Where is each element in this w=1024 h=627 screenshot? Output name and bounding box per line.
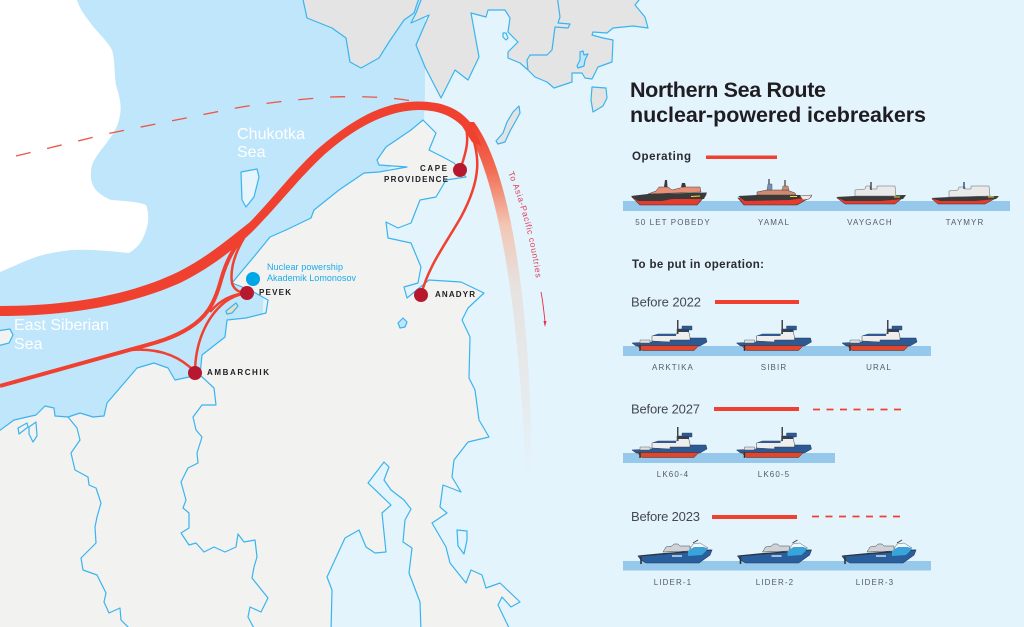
land: Siberian mainland xyxy=(0,120,520,627)
route fading toward Asia-Pacific xyxy=(462,122,532,482)
water strip: before 2027 xyxy=(623,453,835,463)
ship names: operating xyxy=(635,218,984,227)
ship names: operating: TAYMYR xyxy=(946,218,984,227)
heading: to be put in operation: To be put in operation: xyxy=(632,259,764,271)
title xyxy=(630,78,926,127)
branch to Pevek xyxy=(232,238,247,293)
ship names: before 2023 xyxy=(654,578,894,587)
nuclear powership marker xyxy=(246,262,356,286)
rivers and coast inlets xyxy=(68,417,133,627)
ship: Arktika xyxy=(632,320,707,351)
legend: before 2022: Before 2022 xyxy=(631,294,701,310)
port: Cape Providence: CAPE xyxy=(420,164,448,173)
branch to Anadyr xyxy=(421,130,477,295)
port: Cape Providence: PROVIDENCE xyxy=(384,175,449,184)
ship names: before 2023: LIDER-2 xyxy=(756,578,794,587)
land: far-side continent xyxy=(302,0,420,68)
legend: before 2023 xyxy=(631,509,901,524)
label: Chukotka Sea xyxy=(237,126,305,161)
port: Pevek: PEVEK xyxy=(259,288,291,297)
ship: 50 Let Pobedy xyxy=(631,180,707,205)
port: Cape Providence xyxy=(384,163,467,184)
arrow: to Asia-Pacific xyxy=(541,292,546,327)
title: nuclear-powered icebreakers xyxy=(630,103,926,127)
islands xyxy=(0,33,607,554)
port: Anadyr xyxy=(414,288,475,302)
ship: LK60-5 xyxy=(736,427,812,458)
ship names: before 2022 xyxy=(652,363,892,372)
ship: Vaygach xyxy=(836,182,906,204)
branch to Cape Providence xyxy=(460,120,467,170)
ship: Lider-1 xyxy=(638,540,712,564)
ship: Sibir xyxy=(736,320,812,351)
legend: operating xyxy=(632,151,777,163)
ship: Yamal xyxy=(738,179,812,205)
port: Pevek xyxy=(240,286,291,300)
ship: Taymyr xyxy=(931,182,999,204)
main thick route xyxy=(0,102,482,316)
ship names: before 2027: LK60-4 xyxy=(657,470,689,479)
ship: Lider-3 xyxy=(842,540,916,564)
water strip: before 2022 xyxy=(623,346,931,356)
dashed northern route xyxy=(16,97,412,156)
legend: before 2023: Before 2023 xyxy=(631,509,700,524)
ship: LK60-4 xyxy=(632,427,707,458)
ship: Lider-2 xyxy=(738,540,812,564)
port: Anadyr: ANADYR xyxy=(435,290,475,299)
ship names: before 2023: LIDER-3 xyxy=(856,578,894,587)
water strip: before 2023 xyxy=(623,561,931,570)
nuclear powership marker: Akademik Lomonosov xyxy=(267,273,356,283)
legend: before 2027 xyxy=(631,402,903,416)
land: northern peninsula xyxy=(411,0,648,98)
ship names: operating: 50 LET POBEDY xyxy=(635,218,711,227)
branch to Ambarchik xyxy=(195,293,247,373)
legend: operating: Operating xyxy=(632,151,691,163)
sea ice xyxy=(0,0,148,272)
ship names: before 2022: SIBIR xyxy=(761,363,787,372)
port: Ambarchik xyxy=(188,366,269,380)
lower route branch xyxy=(0,236,244,386)
Chukotka and East Siberian Sea area xyxy=(0,0,425,445)
label: To Asia-Pacific countries: To Asia-Pacific countries xyxy=(508,170,540,278)
legend: before 2022 xyxy=(631,294,799,310)
water strip: operating xyxy=(623,201,1010,211)
ship names: before 2027: LK60-5 xyxy=(758,470,790,479)
ship names: operating: YAMAL xyxy=(758,218,790,227)
label: East Siberian Sea xyxy=(14,317,109,353)
ship names: before 2023: LIDER-1 xyxy=(654,578,692,587)
label: Chukotka Sea: Chukotka xyxy=(237,126,305,143)
ship names: before 2022: URAL xyxy=(866,363,892,372)
ship names: before 2022: ARKTIKA xyxy=(652,363,694,372)
label: East Siberian Sea: Sea xyxy=(14,336,43,353)
ship names: operating: VAYGACH xyxy=(847,218,893,227)
nuclear powership marker: Nuclear powership xyxy=(267,262,343,272)
label: Chukotka Sea: Sea xyxy=(237,144,266,161)
routes: main and branches xyxy=(0,102,482,386)
map: Arctic sea and ice background xyxy=(0,0,648,627)
label: East Siberian Sea: East Siberian xyxy=(14,317,109,334)
legend: before 2027: Before 2027 xyxy=(631,402,700,416)
title: Northern Sea Route xyxy=(630,78,826,102)
ship: Ural xyxy=(842,320,917,351)
ship names: before 2027 xyxy=(657,470,790,479)
port: Ambarchik: AMBARCHIK xyxy=(207,368,269,377)
